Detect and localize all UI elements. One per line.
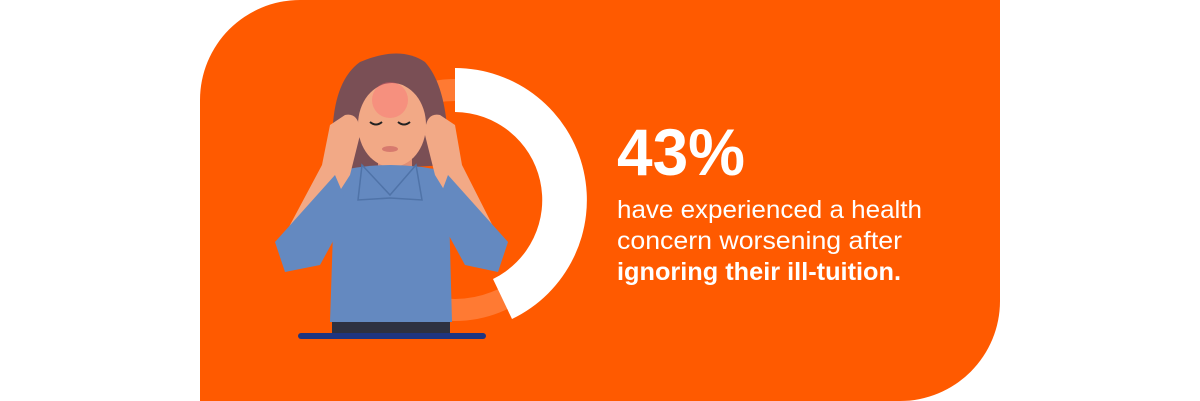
face [358,83,426,167]
headache glow [372,82,408,118]
shirt body [330,165,452,322]
stat number: 43% [617,115,745,189]
pants [332,322,450,334]
right arm [425,115,500,245]
neck [378,150,412,185]
eyes and mouth [370,122,410,124]
description text: have experienced a health [617,196,922,224]
description text: ignoring their ill-tuition. [617,258,901,286]
hair [332,54,448,170]
description text: concern worsening after [617,227,902,255]
illustration: woman with headache [275,54,508,339]
collar [358,165,422,200]
left arm [282,115,360,245]
donut chart: 43% [345,68,587,319]
panel: orange background card [200,0,1000,401]
desk line [298,333,486,339]
description text [617,196,922,286]
